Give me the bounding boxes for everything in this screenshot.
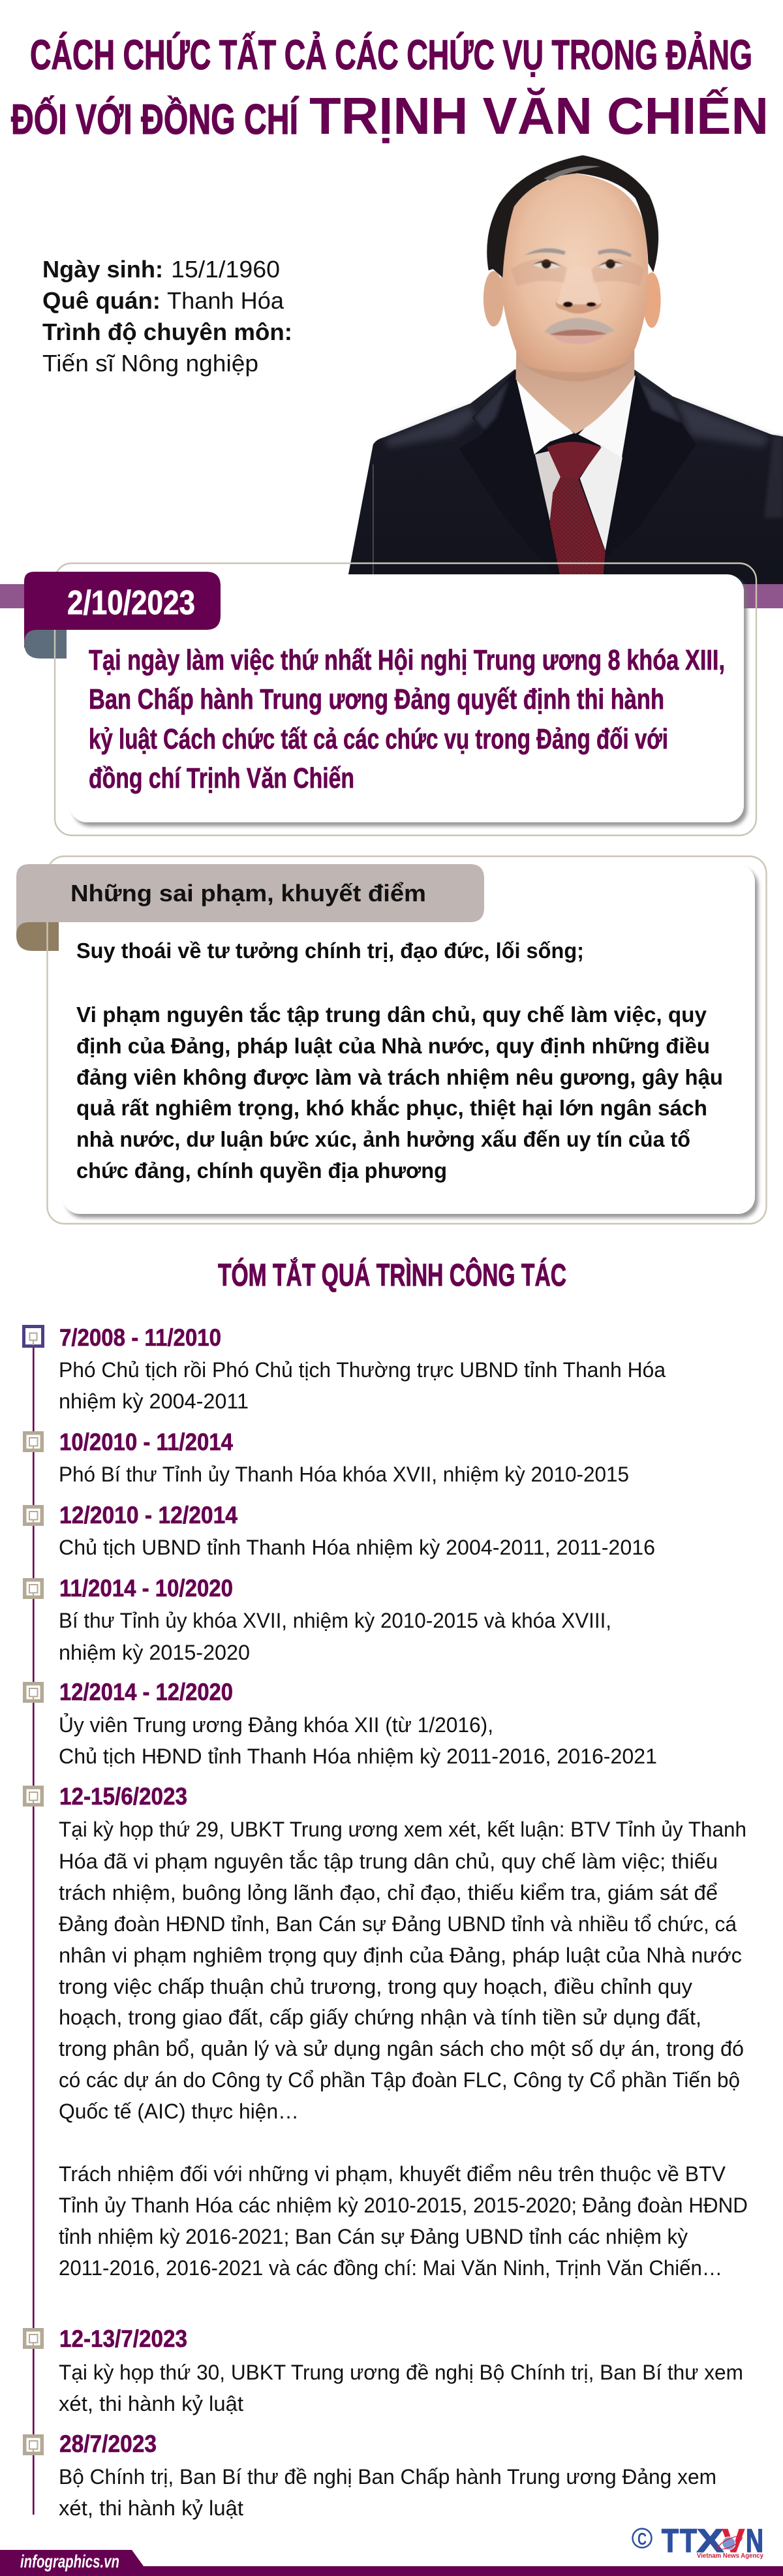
ribbon fold <box>16 914 59 951</box>
violations text: định của Đảng, pháp luật của Nhà nước, quy định những điều <box>76 1034 710 1058</box>
timeline item: 12/2014 - 12/2020: Chủ tịch HĐND tỉnh Thanh Hóa nhiệm kỳ 2011-2016, 2016-2021 <box>59 1745 657 1768</box>
title <box>11 31 769 145</box>
title: ĐỐI VỚI ĐỒNG CHÍ <box>11 95 299 143</box>
section tag <box>16 864 484 922</box>
icon: marker <box>23 1786 44 1807</box>
timeline item: 10/2010 - 11/2014: 10/2010 - 11/2014 <box>59 1429 233 1455</box>
timeline item: 12-15/6/2023: Tỉnh ủy Thanh Hóa các nhiệm kỳ 2010-2015, 2015-2020; Đảng đoàn HĐND <box>59 2194 748 2217</box>
timeline item: 12-15/6/2023: Hóa đã vi phạm nguyên tắc tập trung dân chủ, quy chế làm việc; thiếu <box>59 1850 718 1873</box>
section tag: Những sai phạm, khuyết điểm <box>70 880 426 907</box>
icon: TTXVN logo: N <box>746 2522 763 2559</box>
timeline item: 12/2010 - 12/2014: 12/2010 - 12/2014 <box>59 1502 238 1529</box>
biography details: Quê quán: <box>42 287 161 314</box>
timeline item: 12-15/6/2023: Trách nhiệm đối với những vi phạm, khuyết điểm nêu trên thuộc về BTV <box>59 2162 726 2186</box>
timeline item: 12-15/6/2023: trách nhiệm, buông lỏng lãnh đạo, chỉ đạo, thiếu kiểm tra, giám sát để <box>59 1881 718 1904</box>
timeline item: 12-15/6/2023: nhân vi phạm nghiêm trọng quy định của Đảng, pháp luật của Nhà nước <box>59 1944 742 1967</box>
timeline item: 12/2014 - 12/2020: Ủy viên Trung ương Đảng khóa XII (từ 1/2016), <box>59 1713 493 1737</box>
timeline item: 7/2008 - 11/2010: 7/2008 - 11/2010 <box>59 1324 221 1351</box>
biography details: Tiến sĩ Nông nghiệp <box>42 350 258 377</box>
title: TRỊNH VĂN CHIẾN <box>309 87 769 145</box>
timeline item: 12-13/7/2023: 12-13/7/2023 <box>59 2325 187 2352</box>
violations text <box>76 939 723 1183</box>
icon: TTXVN logo <box>633 2522 763 2560</box>
timeline item: 12-15/6/2023 <box>23 1783 748 2280</box>
icon: marker <box>22 1325 44 1348</box>
footer band: infographics.vn <box>20 2551 119 2571</box>
icon: marker <box>23 1682 44 1703</box>
violations text: Suy thoái về tư tưởng chính trị, đạo đức, lối sống; <box>76 939 584 963</box>
timeline item: 12/2014 - 12/2020: 12/2014 - 12/2020 <box>59 1679 233 1705</box>
timeline item: 12-15/6/2023: Quốc tế (AIC) thực hiện… <box>59 2100 299 2123</box>
timeline item: 12-15/6/2023: trong việc chấp thuận chủ trương, trong quy hoạch, điều chỉnh quy <box>59 1975 692 1998</box>
violations text: Vi phạm nguyên tắc tập trung dân chủ, quy chế làm việc, quy <box>76 1002 707 1027</box>
decision text <box>89 644 725 794</box>
biography details: Ngày sinh: <box>42 256 163 283</box>
violations text: nhà nước, dư luận bức xúc, ảnh hưởng xấu đến uy tín của tổ <box>76 1127 690 1151</box>
panel: decision <box>24 563 756 835</box>
biography details: Thanh Hóa <box>167 287 284 314</box>
icon: marker <box>23 2328 44 2349</box>
timeline item: 28/7/2023: xét, thi hành kỷ luật <box>59 2496 243 2520</box>
decision text: đồng chí Trịnh Văn Chiến <box>89 762 354 794</box>
timeline item: 12-15/6/2023: 12-15/6/2023 <box>59 1783 187 1810</box>
portrait photo <box>346 155 783 586</box>
panel: violations <box>16 856 766 1224</box>
icon: marker <box>23 1505 44 1526</box>
heading: career summary: TÓM TẮT QUÁ TRÌNH CÔNG TÁC <box>218 1257 566 1293</box>
timeline item: 12-15/6/2023: Đảng đoàn HĐND tỉnh, Ban Cán sự Đảng UBND tỉnh và nhiều tổ chức, cá <box>59 1912 737 1936</box>
icon: marker <box>23 2434 44 2455</box>
panel card <box>63 865 755 1214</box>
timeline item: 11/2014 - 10/2020 <box>23 1575 611 1664</box>
violations text: đảng viên không được làm và trách nhiệm nêu gương, gây hậu <box>76 1065 723 1089</box>
panel card <box>70 574 744 822</box>
timeline item: 28/7/2023 <box>23 2430 716 2520</box>
biography details <box>42 256 292 377</box>
timeline item: 12-15/6/2023: hoạch, trong giao đất, cấp giấy chứng nhận và tính tiền sử dụng đất, <box>59 2006 701 2029</box>
icon: TTXVN logo: V <box>722 2522 745 2559</box>
timeline item: 10/2010 - 11/2014: Phó Bí thư Tỉnh ủy Thanh Hóa khóa XVII, nhiệm kỳ 2010-2015 <box>59 1463 629 1486</box>
icon: TTXVN logo: X <box>697 2522 724 2559</box>
timeline item: 28/7/2023: Bộ Chính trị, Ban Bí thư đề nghị Ban Chấp hành Trung ương Đảng xem <box>59 2465 716 2489</box>
timeline item: 12-15/6/2023: Tại kỳ họp thứ 29, UBKT Trung ương xem xét, kết luận: BTV Tỉnh ủy Thanh <box>59 1818 746 1841</box>
timeline item: 12-13/7/2023: Tại kỳ họp thứ 30, UBKT Trung ương đề nghị Bộ Chính trị, Ban Bí thư xem <box>59 2361 743 2384</box>
timeline item: 12-15/6/2023: trong phân bổ, quản lý và sử dụng ngân sách cho một số dự án, trong đó <box>59 2037 744 2060</box>
timeline item: 12/2010 - 12/2014: Chủ tịch UBND tỉnh Thanh Hóa nhiệm kỳ 2004-2011, 2011-2016 <box>59 1536 655 1559</box>
icon: TTXVN logo: T <box>662 2522 679 2559</box>
date tag: 2/10/2023 <box>67 584 195 622</box>
timeline item: 7/2008 - 11/2010 <box>22 1324 666 1413</box>
violations text: quả rất nghiêm trọng, khó khắc phục, thiệt hại lớn ngân sách <box>76 1096 707 1120</box>
timeline item: 28/7/2023: 28/7/2023 <box>59 2430 157 2457</box>
date tag <box>24 572 221 630</box>
timeline item: 7/2008 - 11/2010: Phó Chủ tịch rồi Phó Chủ tịch Thường trực UBND tỉnh Thanh Hóa <box>59 1358 666 1382</box>
timeline item: 12-13/7/2023: xét, thi hành kỷ luật <box>59 2392 243 2415</box>
biography details: 15/1/1960 <box>171 256 280 283</box>
icon: marker <box>23 1578 44 1599</box>
ribbon fold <box>24 620 67 659</box>
icon: TTXVN logo: C <box>637 2529 647 2549</box>
timeline item: 12/2014 - 12/2020 <box>23 1679 657 1768</box>
timeline item: 12-15/6/2023: có các dự án do Công ty Cổ phần Tập đoàn FLC, Công ty Cổ phần Tiến bộ <box>59 2068 740 2092</box>
timeline item: 12/2010 - 12/2014 <box>23 1502 655 1559</box>
footer band <box>0 2550 783 2576</box>
timeline item: 11/2014 - 10/2020: nhiệm kỳ 2015-2020 <box>59 1641 250 1664</box>
timeline item: 10/2010 - 11/2014 <box>23 1429 629 1486</box>
side accent bars <box>0 584 783 608</box>
timeline item: 7/2008 - 11/2010: nhiệm kỳ 2004-2011 <box>59 1389 249 1413</box>
timeline item: 12-13/7/2023 <box>23 2325 743 2415</box>
violations text: chức đảng, chính quyền địa phương <box>76 1158 447 1183</box>
biography details: Trình độ chuyên môn: <box>42 318 292 345</box>
icon: TTXVN logo: T <box>680 2522 697 2559</box>
timeline line <box>33 1344 35 2515</box>
timeline item: 12-15/6/2023: 2011-2016, 2016-2021 và các đồng chí: Mai Văn Ninh, Trịnh Văn Chiến… <box>59 2256 722 2280</box>
icon: marker <box>23 1431 44 1452</box>
icon: TTXVN logo: Vietnam News Agency <box>697 2553 763 2560</box>
timeline item: 11/2014 - 10/2020: Bí thư Tỉnh ủy khóa XVII, nhiệm kỳ 2010-2015 và khóa XVIII, <box>59 1609 611 1632</box>
timeline item: 12-15/6/2023: tỉnh nhiệm kỳ 2016-2021; Ban Cán sự Đảng UBND tỉnh các nhiệm kỳ <box>59 2225 688 2248</box>
timeline item: 11/2014 - 10/2020: 11/2014 - 10/2020 <box>59 1575 233 1602</box>
